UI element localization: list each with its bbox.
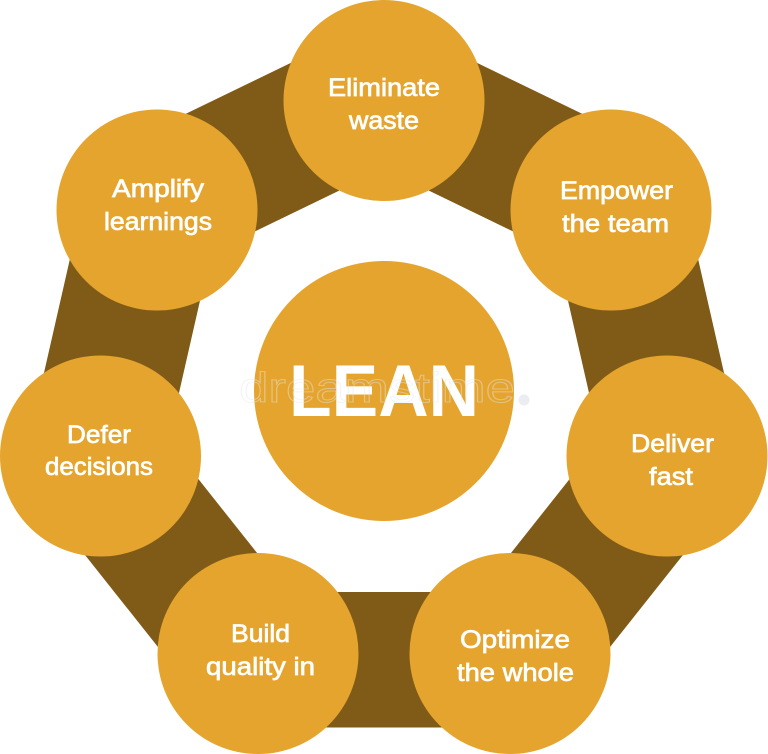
node: Optimize the whole	[410, 553, 610, 754]
node: Empower the team: Empower	[560, 177, 673, 205]
node: Build quality in	[158, 553, 358, 754]
node: Empower the team	[510, 110, 712, 310]
center circle: LEAN	[254, 261, 514, 521]
watermark: dreamstime	[239, 364, 515, 411]
node: Eliminate waste: waste	[348, 107, 419, 135]
node: Eliminate waste	[284, 0, 484, 201]
node: Amplify learnings: Amplify	[112, 175, 205, 203]
node: Deliver fast: Deliver	[631, 430, 714, 458]
node: Optimize the whole: the whole	[457, 659, 574, 687]
node: Defer decisions: decisions	[45, 453, 153, 481]
node: Optimize the whole: Optimize	[460, 626, 570, 654]
node: Build quality in: quality in	[206, 653, 315, 681]
node: Empower the team: the team	[562, 210, 669, 238]
node: Deliver fast: fast	[649, 463, 693, 491]
node: Build quality in: Build	[231, 620, 290, 648]
center circle: LEAN: LEAN	[289, 351, 479, 432]
node: Deliver fast	[566, 356, 768, 556]
node: Amplify learnings: learnings	[104, 208, 212, 236]
node: Defer decisions	[0, 356, 201, 556]
node: Amplify learnings	[56, 110, 258, 310]
node: Eliminate waste: Eliminate	[328, 74, 440, 102]
node: Defer decisions: Defer	[67, 421, 131, 449]
